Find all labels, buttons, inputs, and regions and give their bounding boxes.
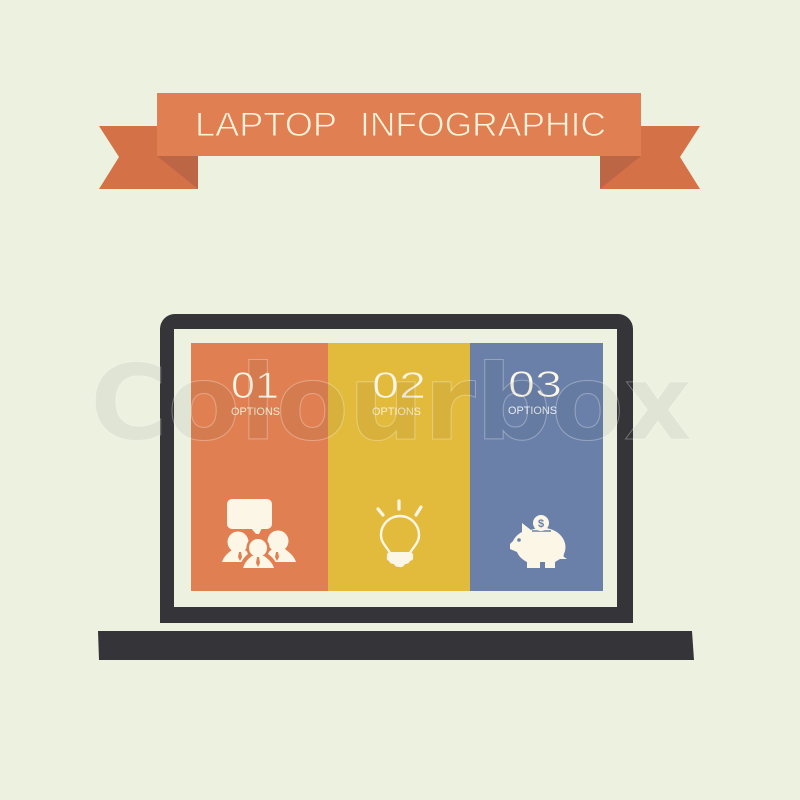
icon: people with speech bubble xyxy=(222,499,296,570)
panel: option 01 xyxy=(191,343,328,591)
number 03: 03 xyxy=(508,363,562,405)
laptop screen xyxy=(174,329,617,607)
number 02: 02 xyxy=(372,364,426,406)
laptop screen bezel xyxy=(160,314,633,623)
label options 01: OPTIONS xyxy=(231,406,280,418)
label options 02: OPTIONS xyxy=(372,406,421,418)
icon: piggy bank with coin: $ xyxy=(538,518,544,530)
panel: option 03 xyxy=(470,343,603,591)
label options 03: OPTIONS xyxy=(508,405,557,417)
laptop xyxy=(98,314,694,660)
number 01: 01 xyxy=(231,364,279,406)
banner left tail xyxy=(99,126,198,189)
title: INFOGRAPHIC xyxy=(360,106,606,144)
icon: piggy bank with coin xyxy=(510,515,567,568)
ribbon banner xyxy=(99,93,700,189)
icon: light bulb xyxy=(378,501,421,567)
banner main strip xyxy=(157,93,641,156)
banner right fold xyxy=(600,156,641,189)
laptop base xyxy=(98,631,694,660)
banner right tail xyxy=(600,126,700,189)
panel: option 02 xyxy=(328,343,470,591)
banner left fold xyxy=(157,156,198,189)
title: LAPTOP xyxy=(195,106,337,144)
watermark: Colourbox xyxy=(90,342,692,464)
